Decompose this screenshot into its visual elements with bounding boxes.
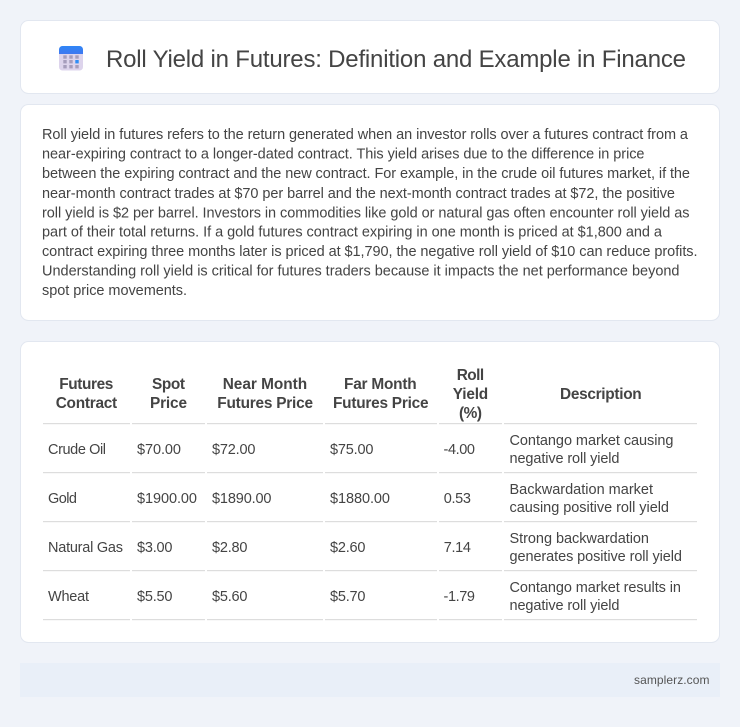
table row: natural gas: Natural Gas (48, 540, 123, 556)
text block: roll yield explanation: between the expiring contract and the new contract. For example, in the crude oil futures market, if the (42, 166, 690, 182)
table header row: Futures Price (217, 395, 313, 412)
table header row: Near Month (223, 376, 307, 393)
table row: wheat: Contango market results in (510, 580, 681, 596)
text block: roll yield explanation (42, 127, 698, 299)
text block: roll yield explanation: near-month contract trades at $70 per barrel and the next-month contract trades at $72, the positive (42, 186, 675, 202)
table header row: (%) (459, 405, 482, 422)
table header row: Roll (457, 367, 484, 384)
table row: crude oil: $70.00 (137, 442, 181, 458)
table header row: Contract (56, 395, 117, 412)
table row: natural gas: $2.80 (212, 540, 248, 556)
table row: natural gas: $2.60 (330, 540, 366, 556)
table row: natural gas: $3.00 (137, 540, 172, 556)
text block: roll yield explanation: contract expiring three months later is priced at $1,790, the negative roll yield of $10 can reduce profits. (42, 244, 698, 260)
text block: roll yield explanation: near-expiring contract to a longer-dated contract. This yield arises due to the difference in price (42, 147, 644, 163)
icon: calendar (59, 46, 83, 70)
table row: crude oil: Crude Oil (48, 442, 106, 458)
title: Roll Yield in Futures: Definition and Example in Finance (106, 46, 686, 73)
table row: gold: $1900.00 (137, 491, 197, 507)
panel: definition paragraph (20, 104, 720, 320)
table row: natural gas: 7.14 (444, 540, 471, 556)
table header row: Futures Price (333, 395, 429, 412)
table row: natural gas (43, 531, 697, 571)
table row: gold: $1890.00 (212, 491, 272, 507)
text block: roll yield explanation: spot price movements. (42, 283, 187, 299)
table row: wheat: $5.70 (330, 589, 366, 605)
footer credit: samplerz.com (634, 673, 710, 687)
table header row: Far Month (344, 376, 417, 393)
table row: crude oil: Contango market causing (510, 433, 674, 449)
table row: gold: 0.53 (444, 491, 471, 507)
text block: roll yield explanation: roll yield is $2 per barrel. Investors in commodities like gold or natural gas often encounter roll yield as (42, 205, 690, 221)
table row: crude oil (43, 433, 697, 473)
table row: gold: causing positive roll yield (510, 500, 669, 516)
table row: crude oil: $75.00 (330, 442, 374, 458)
table row: crude oil: $72.00 (212, 442, 256, 458)
text block: roll yield explanation: part of their total returns. If a gold futures contract expiring in one month is priced at $1,800 and a (42, 225, 663, 241)
table header row: Futures (59, 376, 113, 393)
panel: title header (20, 20, 720, 94)
table row: crude oil: -4.00 (444, 442, 475, 458)
table row: natural gas: generates positive roll yield (510, 549, 682, 565)
table row: wheat (43, 580, 697, 620)
table header row: Yield (453, 386, 488, 403)
table header row: Spot (152, 376, 185, 393)
table row: crude oil: negative roll yield (510, 451, 620, 467)
table row: natural gas: Strong backwardation (510, 531, 649, 547)
footer bar (20, 663, 720, 697)
table row: wheat: $5.60 (212, 589, 248, 605)
panel: futures table (20, 342, 720, 642)
text block: roll yield explanation: Roll yield in futures refers to the return generated when an investor rolls over a futures contract from a (42, 127, 689, 143)
table row: wheat: $5.50 (137, 589, 172, 605)
text block: roll yield explanation: Understanding roll yield is critical for futures traders because it impacts the net performance beyond (42, 264, 680, 280)
table row: gold: Gold (48, 491, 77, 507)
table header row: Description (560, 386, 642, 403)
table header row: Price (150, 395, 187, 412)
table header rules (43, 423, 697, 424)
table row: wheat: -1.79 (444, 589, 475, 605)
table row: wheat: negative roll yield (510, 598, 620, 614)
table header row (56, 367, 642, 422)
table row: gold (43, 482, 697, 522)
table row: wheat: Wheat (48, 589, 89, 605)
table row: gold: Backwardation market (510, 482, 653, 498)
table row: gold: $1880.00 (330, 491, 390, 507)
